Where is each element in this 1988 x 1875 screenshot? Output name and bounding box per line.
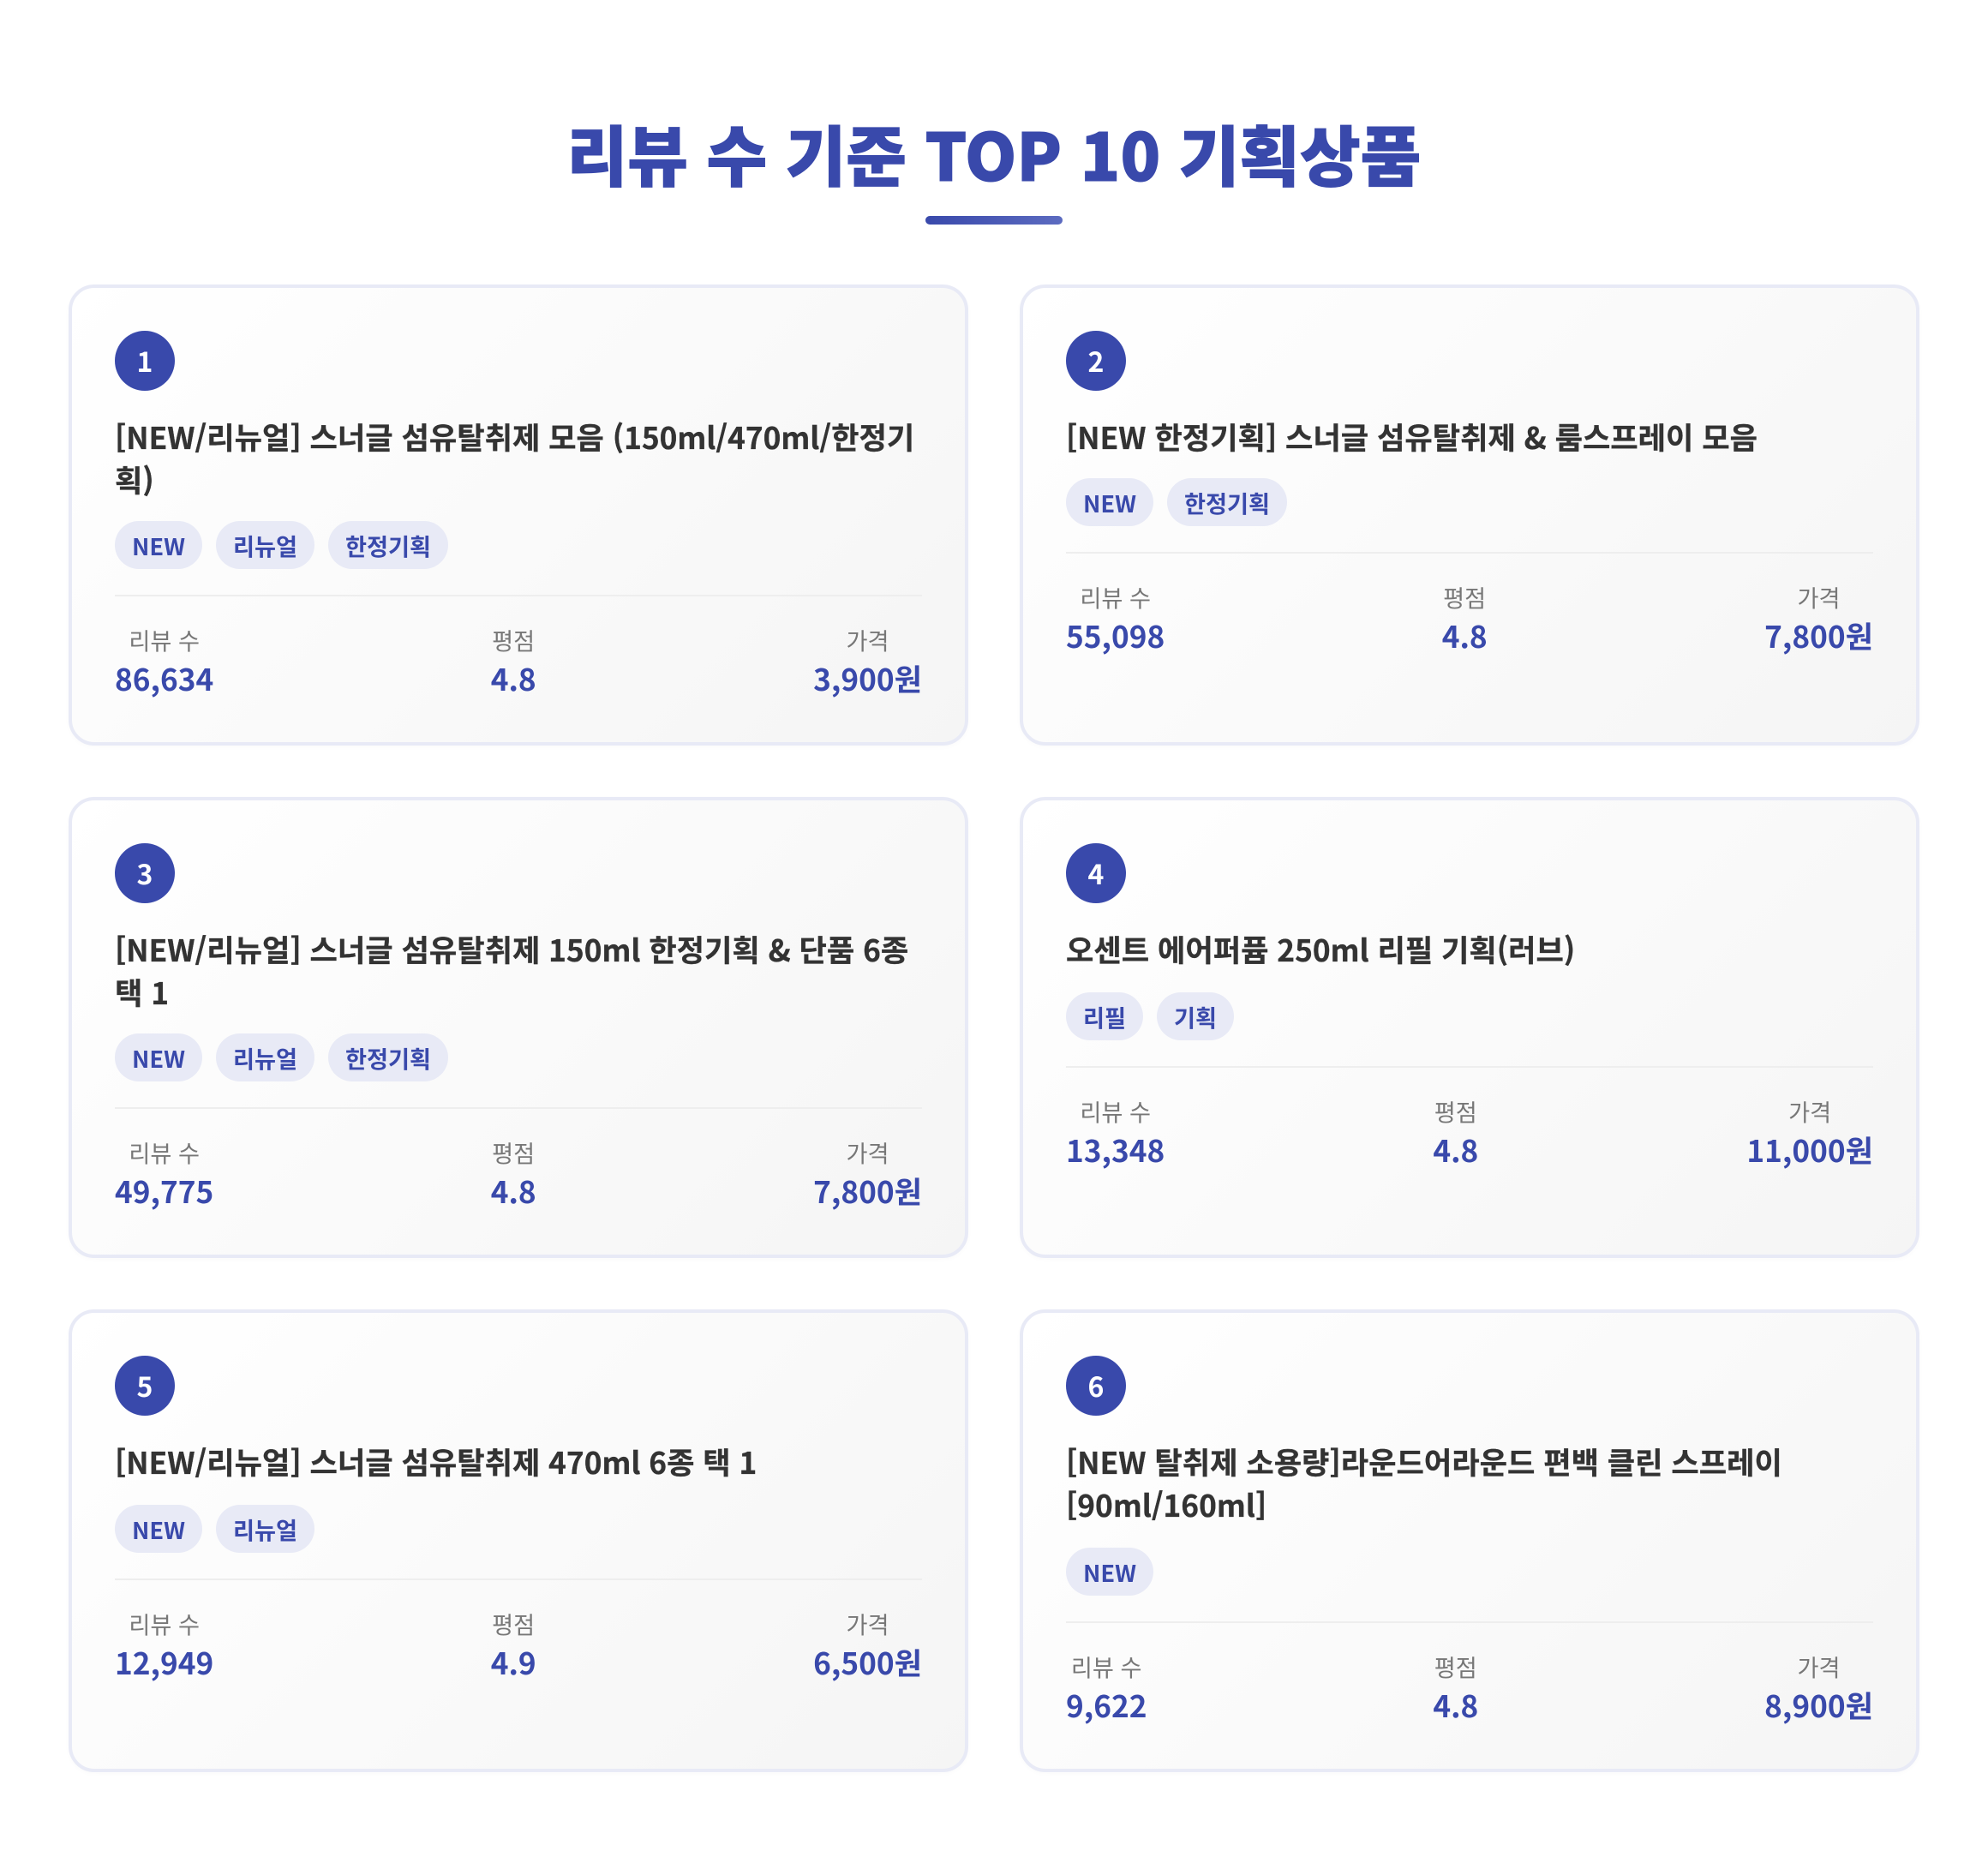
stats 5: 리뷰 수	[129, 1606, 200, 1640]
stats 2: 4.8	[1442, 614, 1488, 657]
tags 5	[115, 1505, 314, 1553]
stats 3: 7,800원	[813, 1169, 922, 1213]
stats 4: 13,348	[1066, 1128, 1165, 1171]
tags 1: 한정기획	[345, 528, 431, 562]
rank badge 4: 4	[1088, 854, 1104, 893]
stats 5: 평점	[492, 1606, 535, 1640]
stats 2: 평점	[1443, 579, 1486, 614]
stats 1: 리뷰 수	[129, 622, 200, 656]
tags 5: NEW	[132, 1512, 185, 1546]
rank badge 2: 2	[1088, 341, 1104, 380]
tags 5: 리뉴얼	[233, 1512, 297, 1546]
stats 3: 49,775	[115, 1169, 213, 1213]
tags 1	[115, 521, 448, 569]
tags 3: 리뉴얼	[233, 1040, 297, 1075]
stats 3: 4.8	[491, 1169, 536, 1213]
stats 2: 가격	[1798, 579, 1841, 614]
tags 3	[115, 1033, 448, 1081]
tags 2: 한정기획	[1184, 485, 1270, 519]
tags 3: 한정기획	[345, 1040, 431, 1075]
stats 3	[115, 1107, 922, 1213]
tags 3: NEW	[132, 1040, 185, 1075]
rank badge 5: 5	[137, 1366, 153, 1405]
tags 1: 리뉴얼	[233, 528, 297, 562]
tags 2	[1066, 478, 1287, 526]
stats 1: 86,634	[115, 656, 213, 700]
stats 5: 12,949	[115, 1640, 213, 1684]
stats 6: 가격	[1798, 1649, 1841, 1683]
stats 6	[1066, 1621, 1873, 1727]
stats 5	[115, 1578, 922, 1684]
panel: product card 4	[1020, 797, 1919, 1258]
product name 5: [NEW/리뉴얼] 스너글 섬유탈취제 470ml 6종 택 1	[115, 1440, 757, 1483]
stats 4: 리뷰 수	[1080, 1093, 1151, 1128]
stats 3: 리뷰 수	[129, 1135, 200, 1169]
panel: product card 3	[69, 797, 968, 1258]
rank badge 6	[1066, 1356, 1126, 1416]
stats 1: 평점	[492, 622, 535, 656]
stats 5: 가격	[847, 1606, 889, 1640]
tags 4: 기획	[1174, 999, 1217, 1033]
stats 4	[1066, 1066, 1873, 1171]
rank badge 2	[1066, 331, 1126, 391]
stats 3: 평점	[492, 1135, 535, 1169]
tags 1: NEW	[132, 528, 185, 562]
rank badge 3	[115, 843, 175, 903]
panel: product card 5	[69, 1309, 968, 1772]
stats 6: 평점	[1434, 1649, 1477, 1683]
panel: product card 2	[1020, 285, 1919, 746]
stats 4: 가격	[1788, 1093, 1831, 1128]
panel: product card 6	[1020, 1309, 1919, 1772]
stats 3: 가격	[847, 1135, 889, 1169]
stats 1	[115, 595, 922, 700]
product name 1: [NEW/리뉴얼] 스너글 섬유탈취제 모음 (150ml/470ml/한정기획)	[115, 415, 914, 501]
tags 6: NEW	[1083, 1555, 1136, 1589]
stats 6: 9,622	[1066, 1683, 1147, 1727]
tags 4	[1066, 992, 1234, 1040]
product name 2: [NEW 한정기획] 스너글 섬유탈취제 & 룸스프레이 모음	[1066, 415, 1757, 458]
stats 5: 4.9	[491, 1640, 536, 1684]
stats 4: 4.8	[1433, 1128, 1478, 1171]
stats 6: 4.8	[1433, 1683, 1478, 1727]
product name 6: [NEW 탈취제 소용량]라운드어라운드 편백 클린 스프레이 [90ml/160ml]	[1066, 1440, 1782, 1526]
rank badge 6: 6	[1088, 1366, 1104, 1405]
title underline	[925, 216, 1063, 225]
rank badge 4	[1066, 843, 1126, 903]
stats 2: 55,098	[1066, 614, 1165, 657]
stats 2	[1066, 552, 1873, 657]
stats 1: 가격	[847, 622, 889, 656]
title: 리뷰 수 기준 TOP 10 기획상품	[567, 105, 1421, 201]
panel: product card 1	[69, 285, 968, 746]
stats 2: 리뷰 수	[1080, 579, 1151, 614]
stats 2: 7,800원	[1764, 614, 1873, 657]
product name 4: 오센트 에어퍼퓸 250ml 리필 기획(러브)	[1066, 927, 1575, 971]
tags 4: 리필	[1083, 999, 1126, 1033]
stats 1: 3,900원	[813, 656, 922, 700]
stats 6: 8,900원	[1764, 1683, 1873, 1727]
product name 3: [NEW/리뉴얼] 스너글 섬유탈취제 150ml 한정기획 & 단품 6종 택 1	[115, 927, 908, 1014]
rank badge 1: 1	[137, 341, 153, 380]
rank badge 5	[115, 1356, 175, 1416]
tags 2: NEW	[1083, 485, 1136, 519]
stats 4: 평점	[1434, 1093, 1477, 1128]
stats 1: 4.8	[491, 656, 536, 700]
rank badge 3: 3	[137, 854, 153, 893]
stats 5: 6,500원	[813, 1640, 922, 1684]
stats 4: 11,000원	[1746, 1128, 1873, 1171]
rank badge 1	[115, 331, 175, 391]
stats 6: 리뷰 수	[1071, 1649, 1142, 1683]
